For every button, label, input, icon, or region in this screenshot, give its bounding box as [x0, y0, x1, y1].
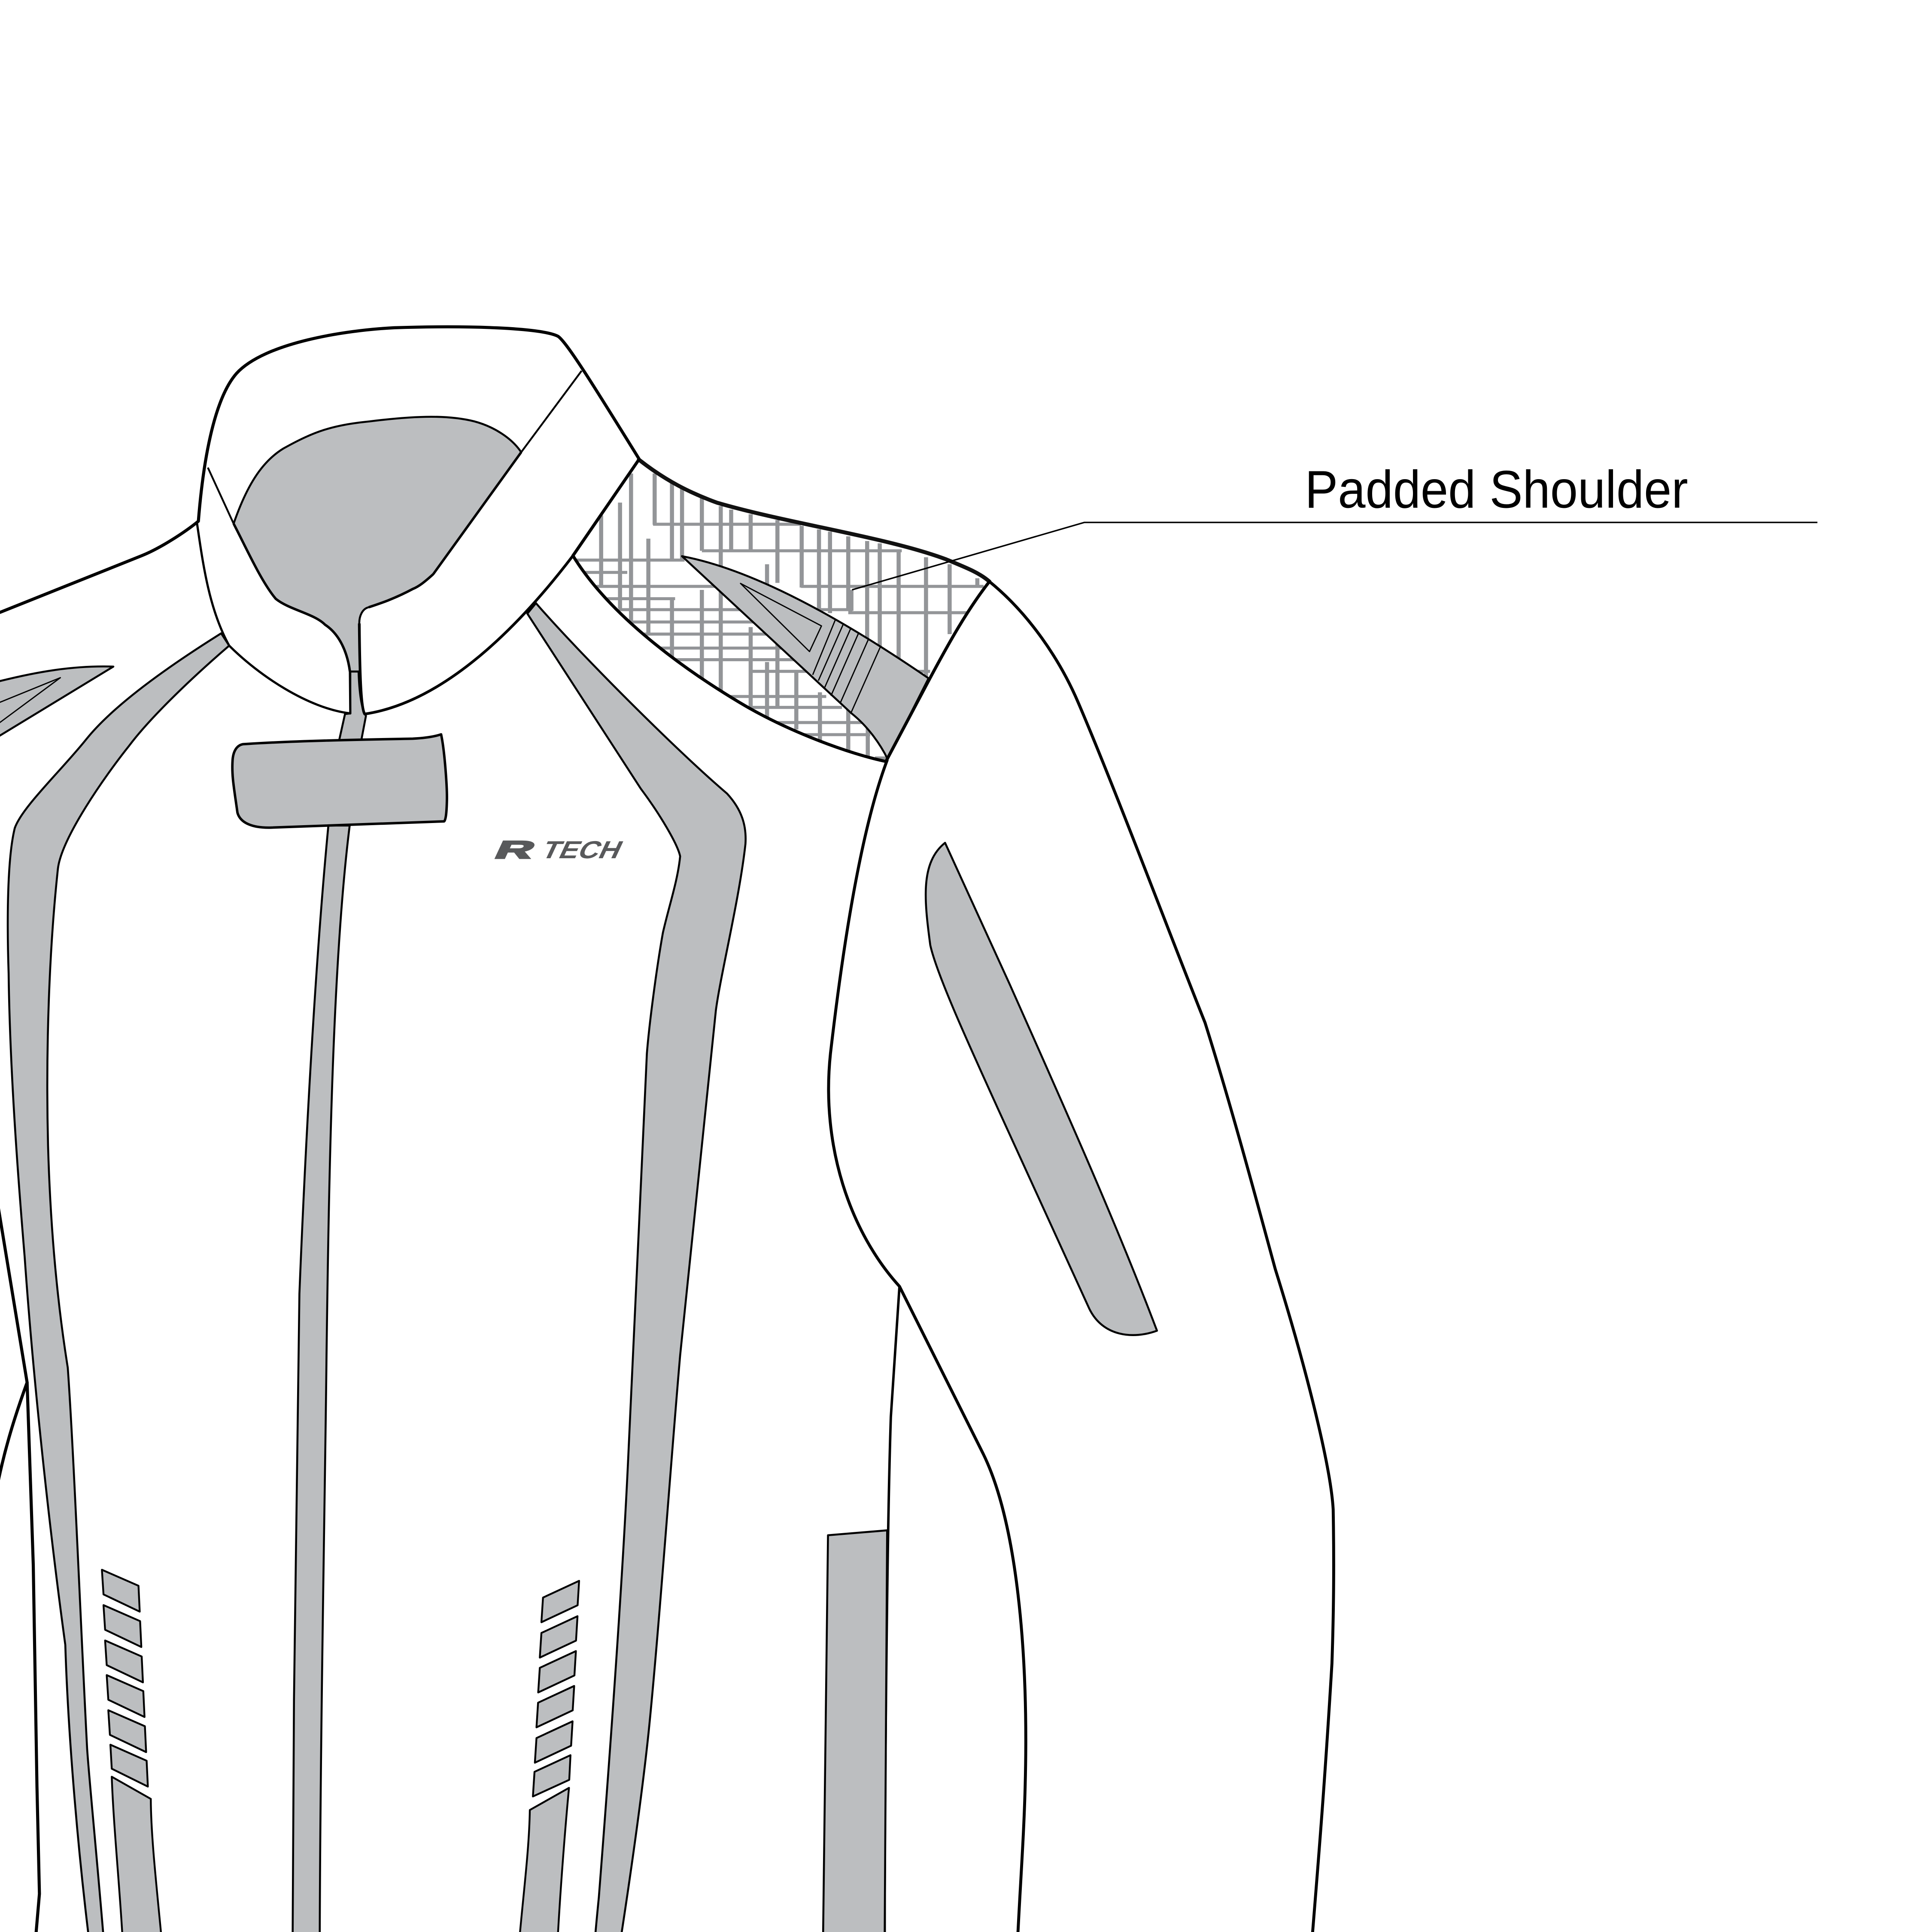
insert ribs — [813, 619, 881, 713]
collar fold line right — [521, 371, 582, 452]
quilted grid stitching — [574, 474, 984, 760]
collar front left — [197, 522, 350, 714]
left sleeve gray insert — [0, 666, 113, 739]
collar tab — [232, 734, 447, 828]
padded shoulder panel — [573, 459, 990, 762]
center zip placket — [293, 671, 366, 1932]
callout — [852, 460, 1817, 590]
sleeve outer edge — [990, 582, 1334, 1932]
left sleeve insert triangle — [0, 677, 61, 727]
shoulder lower seam — [573, 556, 886, 762]
collar fold line left — [208, 468, 234, 524]
sleeve — [829, 582, 1334, 1932]
lower zip strip — [293, 826, 349, 1932]
collar — [197, 327, 639, 714]
left shoulder line — [0, 521, 198, 612]
sleeve inner edge — [829, 760, 1026, 1932]
panel white base — [573, 459, 990, 762]
right chest gray panel — [527, 603, 746, 1932]
callout label: Padded Shoulder — [1305, 460, 1688, 519]
left underarm line — [0, 1195, 27, 1485]
logo word TECH: TECH — [537, 836, 628, 863]
insert inner triangle — [741, 583, 821, 652]
far sleeve and left body outline — [0, 521, 198, 1932]
shoulder sleeve seam — [886, 582, 990, 762]
R-Tech chest logo — [490, 836, 628, 863]
left hem reflective stripes — [102, 1570, 161, 1932]
left body side edge — [27, 1382, 39, 1932]
sleeve gray vent — [926, 843, 1157, 1335]
right hem reflective stripes — [519, 1581, 579, 1932]
logo letter R: R — [490, 836, 540, 863]
inner collar heavier seam — [234, 452, 521, 671]
shoulder gray armour insert — [682, 556, 929, 759]
upper zip strip — [339, 671, 366, 742]
inner collar gray lining — [234, 417, 521, 671]
callout leader line — [852, 522, 1817, 590]
left chest gray panel — [8, 633, 229, 1932]
shoulder collar seam — [573, 459, 639, 556]
jacket technical illustration with callout — [0, 325, 1818, 1932]
collar front right — [365, 556, 573, 714]
body side edge — [885, 1286, 899, 1932]
collar outer edge — [198, 327, 639, 521]
collar centre edge — [359, 623, 365, 714]
side pocket gray panel — [823, 1530, 887, 1932]
shoulder top seam — [639, 459, 990, 582]
